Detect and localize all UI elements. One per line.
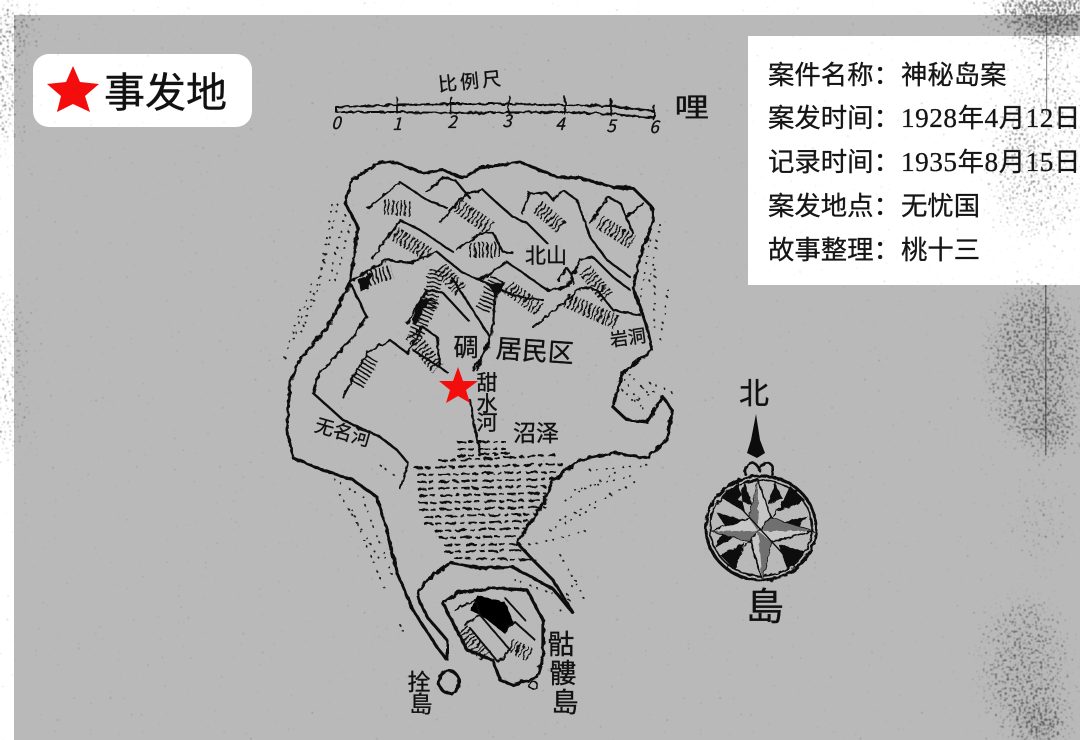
label: islet <box>408 663 432 719</box>
island coastline <box>287 162 672 660</box>
label: sweet water river: 水 <box>476 388 498 418</box>
scale numbers: 1 <box>392 110 402 135</box>
legend <box>33 54 252 127</box>
legend star icon <box>47 66 99 112</box>
compass needle <box>747 414 765 458</box>
label: marsh: 沼泽 <box>513 414 559 448</box>
info panel <box>748 36 1080 285</box>
scale numbers: 5 <box>606 112 618 137</box>
scale numbers: 2 <box>447 108 458 133</box>
case details: 记录时间： <box>768 147 900 177</box>
sweet water river <box>452 278 495 453</box>
case details: 1928年4月12日 <box>901 103 1080 133</box>
nameless river <box>313 283 408 488</box>
case details: 神秘岛案 <box>901 60 1007 90</box>
label: blockhouse: 碉 <box>453 328 479 364</box>
scale numbers: 4 <box>555 110 566 135</box>
compass star points <box>712 480 812 580</box>
case details: 案发时间： <box>768 103 900 133</box>
map: island and labels <box>284 64 709 720</box>
compass north label: 北 <box>739 369 769 413</box>
scale unit: 哩 <box>675 86 709 125</box>
marsh strokes <box>415 442 565 560</box>
legend text: 事发地 <box>104 70 227 116</box>
coastal dots <box>284 205 678 635</box>
scale title: 比例尺 <box>437 64 505 97</box>
dark mountain shadows <box>358 272 505 325</box>
case details: 桃十三 <box>901 235 980 265</box>
label: islet: 拴 <box>408 663 430 697</box>
label: sweet water river: 甜 <box>476 367 498 397</box>
label: residential area: 居民区 <box>495 328 575 371</box>
label: north mountain: 北山 <box>525 240 567 270</box>
scale numbers: 3 <box>502 107 513 132</box>
skull island <box>443 588 543 688</box>
mountain hatching <box>356 206 632 385</box>
compass rose <box>706 369 816 631</box>
case details: 故事整理： <box>768 235 900 265</box>
map linework: coast, mountains and rivers <box>284 96 678 693</box>
incident marker star <box>439 367 478 403</box>
scale numbers: 0 <box>331 109 343 134</box>
label: islet: 島 <box>410 685 432 719</box>
case details <box>768 60 1080 265</box>
case details: 1935年8月15日 <box>901 147 1080 177</box>
case details: 案发地点： <box>768 191 900 221</box>
mountain ridges <box>343 177 643 397</box>
label: cave: 岩洞 <box>608 322 647 352</box>
case details: 无忧国 <box>901 191 980 221</box>
label: skull island: 骷 <box>548 623 574 662</box>
compass island label: 島 <box>746 576 784 631</box>
label: nameless river: 无名河 <box>312 411 374 452</box>
label: skull island <box>548 623 578 720</box>
small islet <box>439 671 459 693</box>
scale numbers <box>331 107 661 138</box>
label: skull island: 島 <box>552 681 578 720</box>
label: skull island: 髏 <box>550 652 576 691</box>
label: sweet water river: 河 <box>476 407 498 437</box>
case details: 案件名称： <box>768 60 900 90</box>
label: sweet water river <box>476 367 498 437</box>
scale bar <box>336 96 654 120</box>
compass ring <box>706 463 816 580</box>
scale numbers: 6 <box>649 113 661 138</box>
